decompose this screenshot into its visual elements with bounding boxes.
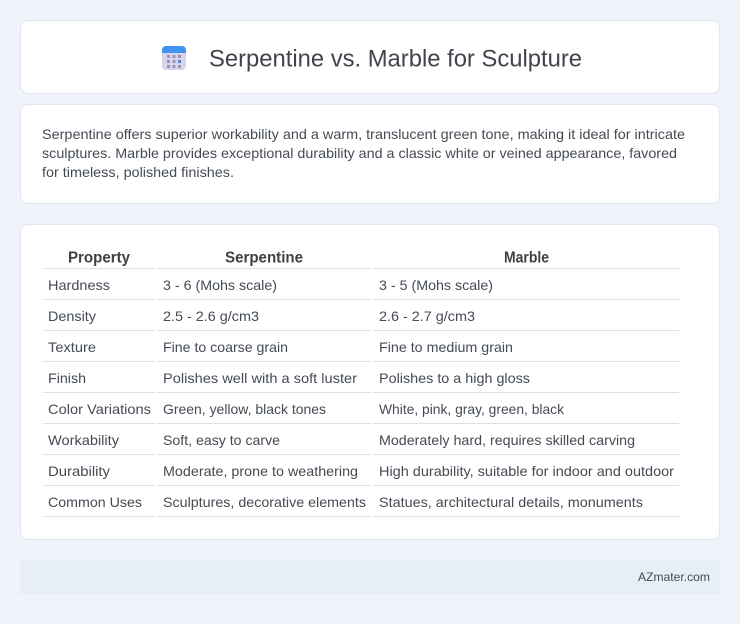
intro text xyxy=(42,126,685,180)
row: common uses: Statues, architectural details, monuments xyxy=(379,494,643,510)
row: finish: Polishes well with a soft luster xyxy=(163,370,357,386)
row: durability: Durability xyxy=(48,463,110,479)
row: finish: Polishes to a high gloss xyxy=(379,370,530,386)
row: common uses xyxy=(48,494,643,510)
panel: comparison table xyxy=(20,224,720,540)
footer xyxy=(20,560,720,594)
row: common uses: Common Uses xyxy=(48,494,142,510)
row: finish: Finish xyxy=(48,370,86,386)
table header: Property xyxy=(68,250,130,266)
row: hardness: Hardness xyxy=(48,277,110,293)
intro text: sculptures. Marble provides exceptional durability and a classic white or veined appearance, favored xyxy=(42,145,677,161)
table header xyxy=(68,250,549,266)
row: color variations xyxy=(48,401,565,417)
row: color variations: Green, yellow, black tones xyxy=(163,401,326,417)
row: texture: Fine to medium grain xyxy=(379,339,513,355)
row: density: Density xyxy=(48,308,96,324)
row: texture: Texture xyxy=(48,339,96,355)
row: texture xyxy=(48,339,513,355)
row: finish xyxy=(48,370,530,386)
intro text: Serpentine offers superior workability and a warm, translucent green tone, making it ideal for intricate xyxy=(42,126,685,142)
row: texture: Fine to coarse grain xyxy=(163,339,288,355)
table header: Marble xyxy=(504,250,549,266)
row: durability xyxy=(48,463,674,479)
panel: introduction xyxy=(20,104,720,204)
row: durability: High durability, suitable for indoor and outdoor xyxy=(379,463,674,479)
row: hardness: 3 - 5 (Mohs scale) xyxy=(379,277,493,293)
row: density: 2.5 - 2.6 g/cm3 xyxy=(163,308,259,324)
row: density xyxy=(48,308,475,324)
row: hardness: 3 - 6 (Mohs scale) xyxy=(163,277,277,293)
icon: calendar xyxy=(162,46,186,70)
footer credit: AZmater.com xyxy=(638,570,710,584)
intro text: for timeless, polished finishes. xyxy=(42,164,234,180)
row: density: 2.6 - 2.7 g/cm3 xyxy=(379,308,475,324)
panel: title xyxy=(20,20,720,94)
row: workability: Moderately hard, requires skilled carving xyxy=(379,432,635,448)
row: common uses: Sculptures, decorative elements xyxy=(163,494,366,510)
row: hardness xyxy=(48,277,493,293)
title text: Serpentine vs. Marble for Sculpture xyxy=(209,46,582,72)
row: color variations: Color Variations xyxy=(48,401,151,417)
row: durability: Moderate, prone to weathering xyxy=(163,463,358,479)
row: workability xyxy=(48,432,635,448)
table header: Serpentine xyxy=(225,250,303,266)
row: workability: Soft, easy to carve xyxy=(163,432,280,448)
row: color variations: White, pink, gray, green, black xyxy=(379,401,565,417)
row: workability: Workability xyxy=(48,432,119,448)
